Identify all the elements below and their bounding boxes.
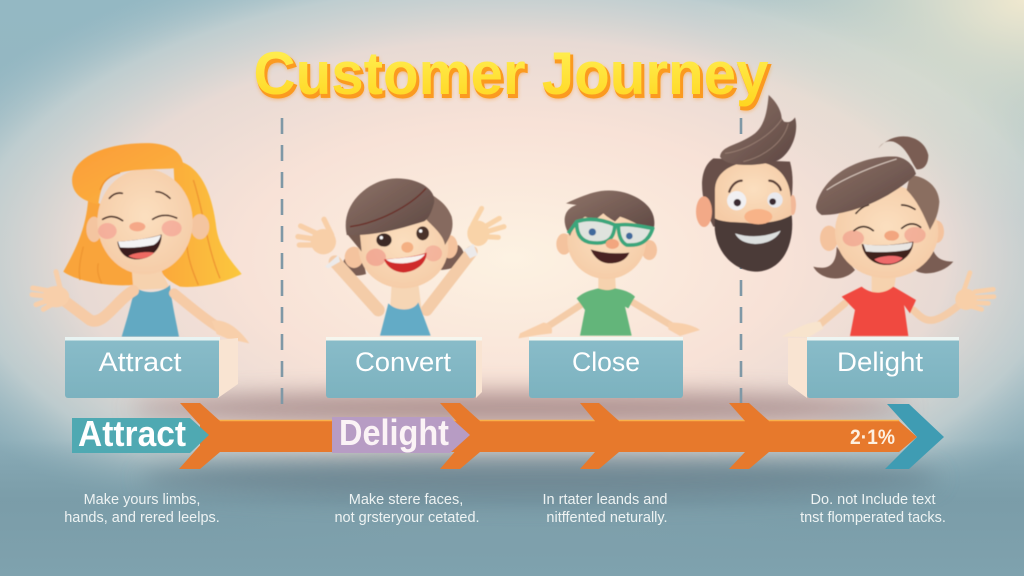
panel: Attract box	[65, 337, 238, 398]
divider: left dashed line	[281, 118, 283, 405]
panel: Convert box	[326, 337, 482, 398]
panel: Close box	[529, 337, 683, 398]
label: percentage: 2·1%	[850, 426, 895, 449]
label: Attract tag: Attract	[78, 413, 186, 454]
divider: right dashed line	[740, 118, 742, 405]
caption: Attract: hands, and rered leelps.	[64, 510, 220, 526]
title: Customer Journey	[256, 44, 771, 111]
panel: Delight box	[788, 337, 959, 398]
panel: Delight box: Delight	[837, 347, 924, 377]
caption: Delight: not grsteryour cetated.	[334, 510, 480, 526]
label: Delight tag: Delight	[339, 412, 449, 453]
panel: Convert box: Convert	[355, 347, 451, 377]
character: boy with green glasses	[518, 190, 700, 338]
character: bearded man's head	[696, 95, 796, 272]
caption: Final stage: tnst flomperated tacks.	[800, 510, 946, 526]
caption: Close: nitffented neturally.	[546, 510, 668, 526]
character: orange-haired girl	[32, 143, 249, 343]
caption: Final stage: Do. not Include text	[811, 492, 935, 508]
title: Customer Journey	[256, 43, 771, 110]
character: girl with bun	[782, 136, 994, 337]
panel: Attract box: Attract	[98, 347, 182, 377]
character: girl with raised arms	[298, 178, 504, 336]
caption: Attract: Make yours limbs,	[84, 492, 200, 508]
panel: Close box: Close	[572, 347, 640, 377]
title: Customer Journey	[254, 40, 769, 107]
caption: Close: In rtater leands and	[543, 492, 667, 508]
caption: Delight: Make stere faces,	[349, 492, 463, 508]
arrow chevrons	[179, 403, 769, 469]
timeline arrow	[72, 403, 944, 469]
